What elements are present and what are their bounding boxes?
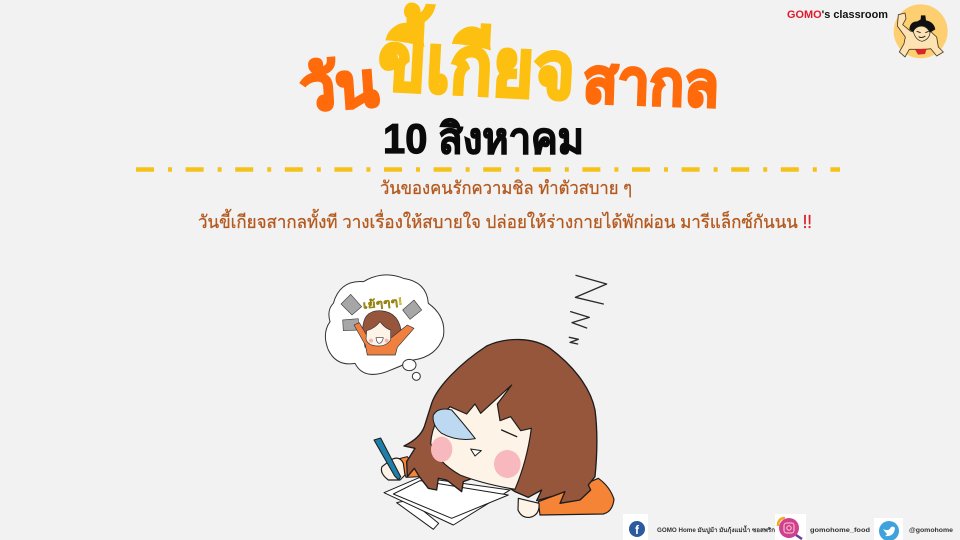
mascot body: [897, 13, 943, 57]
title word: khi kiat: ขี้เกียจ: [376, 3, 578, 116]
closed eye and mouth: [502, 430, 517, 437]
brand label: GOMO's classroom: [787, 9, 888, 21]
mascot loincloth: [915, 49, 927, 55]
thought: papers: [341, 294, 422, 331]
instagram block: [775, 514, 806, 540]
intro text line 2: วันขี้เกียจสากลทั้งที วางเรื่องให้สบายใจ ปล่อยให้ร่างกายได้พักผ่อน มารีแล็กซ์กันนน !!: [198, 209, 812, 232]
title word: sakon: สากล: [582, 47, 720, 120]
sleeve and writing hand: [399, 457, 420, 477]
title word: wan: วัน: [298, 50, 380, 125]
instagram label: gomohome_food: [810, 528, 870, 534]
twitter block: [874, 518, 903, 540]
hair: [404, 339, 597, 503]
thought: small girl: [354, 311, 414, 355]
paper stack: [384, 477, 510, 529]
illustration: sleeping girl: [325, 275, 614, 529]
blush: [431, 437, 452, 462]
social footer: [623, 514, 954, 540]
pen: [374, 438, 401, 480]
subtitle date: 10 สิงหาคม: [383, 115, 584, 162]
title: [298, 3, 720, 162]
thought: cheering text: เย้ๆๆๆ!: [362, 295, 403, 312]
facebook block: f: [635, 523, 640, 537]
dashed divider: [136, 167, 840, 172]
intro text line 1: วันของคนรักความชิล ทำตัวสบาย ๆ: [380, 178, 632, 198]
hand under face: [518, 498, 539, 517]
twitter label: @gomohome: [909, 528, 954, 534]
facebook block: [623, 514, 648, 540]
teardrop bubble: [433, 409, 475, 439]
mascot hair: [909, 15, 935, 33]
face: [431, 385, 531, 489]
facebook label: GOMO Home มันปูม้า มันกุ้งแม่น้ำ ซอสพริก: [657, 524, 775, 535]
thought bubble: [325, 275, 444, 380]
zzz: [569, 275, 607, 344]
body: [538, 478, 614, 515]
icon: sumo mascot: [894, 4, 948, 58]
mascot face: [913, 26, 930, 41]
